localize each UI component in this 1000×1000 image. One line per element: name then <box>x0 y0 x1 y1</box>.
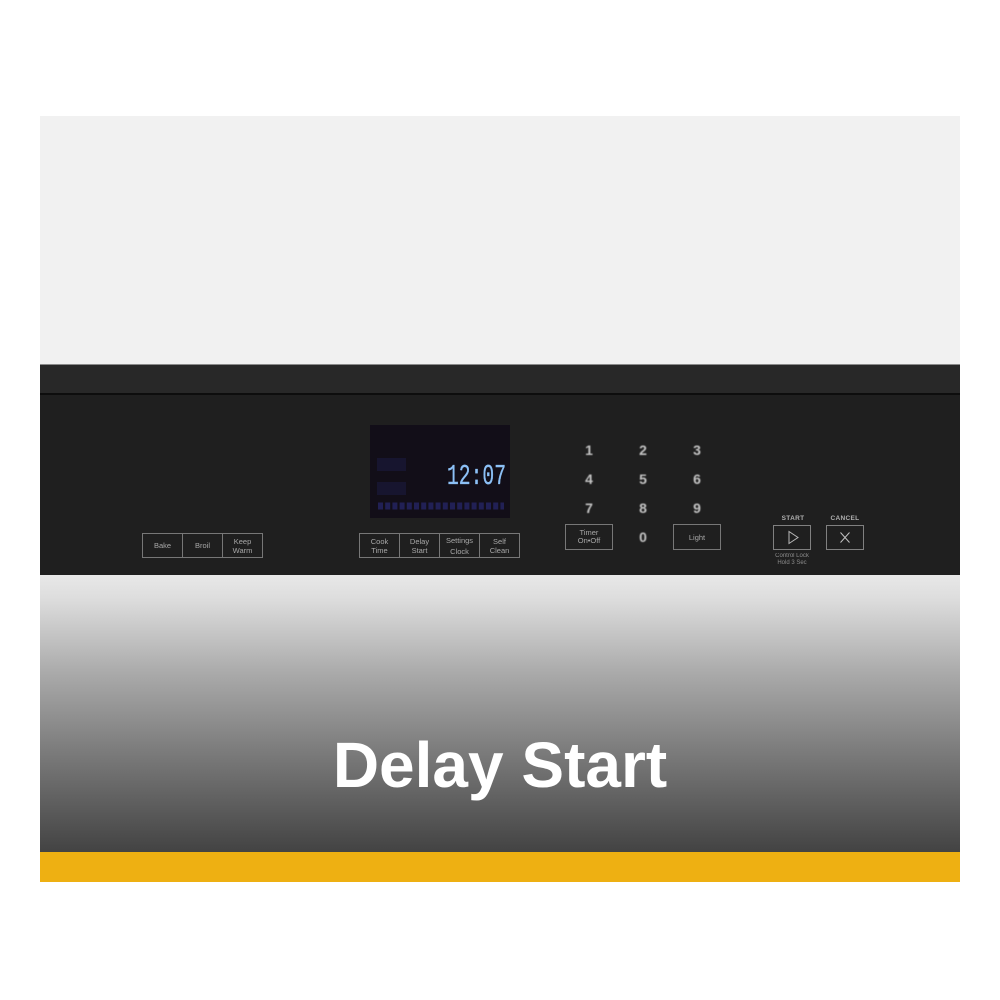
key 3: 3 <box>693 442 701 458</box>
button: Cook Time: Time <box>371 546 388 554</box>
button: Bake <box>142 533 183 558</box>
button: Light <box>673 524 721 550</box>
button: start play <box>773 525 811 550</box>
button: Settings Clock <box>439 533 480 558</box>
button: Light: Light <box>689 532 705 542</box>
dim indicator segments lower <box>377 482 406 495</box>
button: Keep Warm: Warm <box>233 546 252 554</box>
label: control lock: Control Lock <box>775 553 809 559</box>
button: Timer On/Off: Timer <box>580 528 598 537</box>
label: control lock: Hold 3 Sec <box>777 560 807 566</box>
number keypad <box>584 442 702 545</box>
key 5: 5 <box>639 471 647 487</box>
key 8: 8 <box>639 500 647 516</box>
button: Timer On/Off: On•Off <box>578 536 600 545</box>
button: cancel <box>826 525 864 550</box>
button: Keep Warm: Keep <box>234 536 251 546</box>
key 7: 7 <box>585 500 593 516</box>
icon: play <box>788 530 799 544</box>
button: Delay Start <box>399 533 440 558</box>
key 2: 2 <box>639 442 647 458</box>
key 4: 4 <box>585 471 593 487</box>
button: Self Clean: Clean <box>490 546 509 554</box>
panel: oven control top trim <box>40 364 960 395</box>
button: Settings Clock: Settings <box>446 536 473 544</box>
button: Cook Time <box>359 533 400 558</box>
button: Settings Clock: Clock <box>450 546 469 556</box>
key 0: 0 <box>639 529 647 545</box>
icon: cancel x <box>840 532 850 543</box>
accent bar <box>40 852 960 882</box>
button: Delay Start: Start <box>412 546 427 554</box>
display readouts <box>377 458 506 510</box>
panel: oven control console <box>40 395 960 575</box>
key 1: 1 <box>585 442 593 458</box>
button group: Cook Time, Delay Start, Settings Clock, Self Clean <box>359 533 520 558</box>
button: Delay Start: Delay <box>410 536 429 546</box>
label: control lock <box>775 553 809 566</box>
button: Self Clean <box>479 533 520 558</box>
button: Bake: Bake <box>154 541 171 550</box>
button: Broil <box>182 533 223 558</box>
panel: gradient caption band <box>40 575 960 852</box>
panel: upper light background <box>40 116 960 364</box>
button group: Bake, Broil, Keep Warm <box>142 533 263 558</box>
dim indicator row <box>378 502 504 510</box>
button: Self Clean: Self <box>493 536 506 546</box>
key 6: 6 <box>693 471 701 487</box>
button: Timer On/Off <box>565 524 613 550</box>
button: Broil: Broil <box>195 541 210 550</box>
label: CANCEL: CANCEL <box>831 515 859 522</box>
title: Delay Start <box>333 729 667 801</box>
label: START: START <box>782 515 804 522</box>
dim indicator segments upper <box>377 458 406 471</box>
display screen <box>370 425 510 518</box>
key 9: 9 <box>693 500 701 516</box>
button: Cook Time: Cook <box>371 536 388 546</box>
button: Keep Warm <box>222 533 263 558</box>
